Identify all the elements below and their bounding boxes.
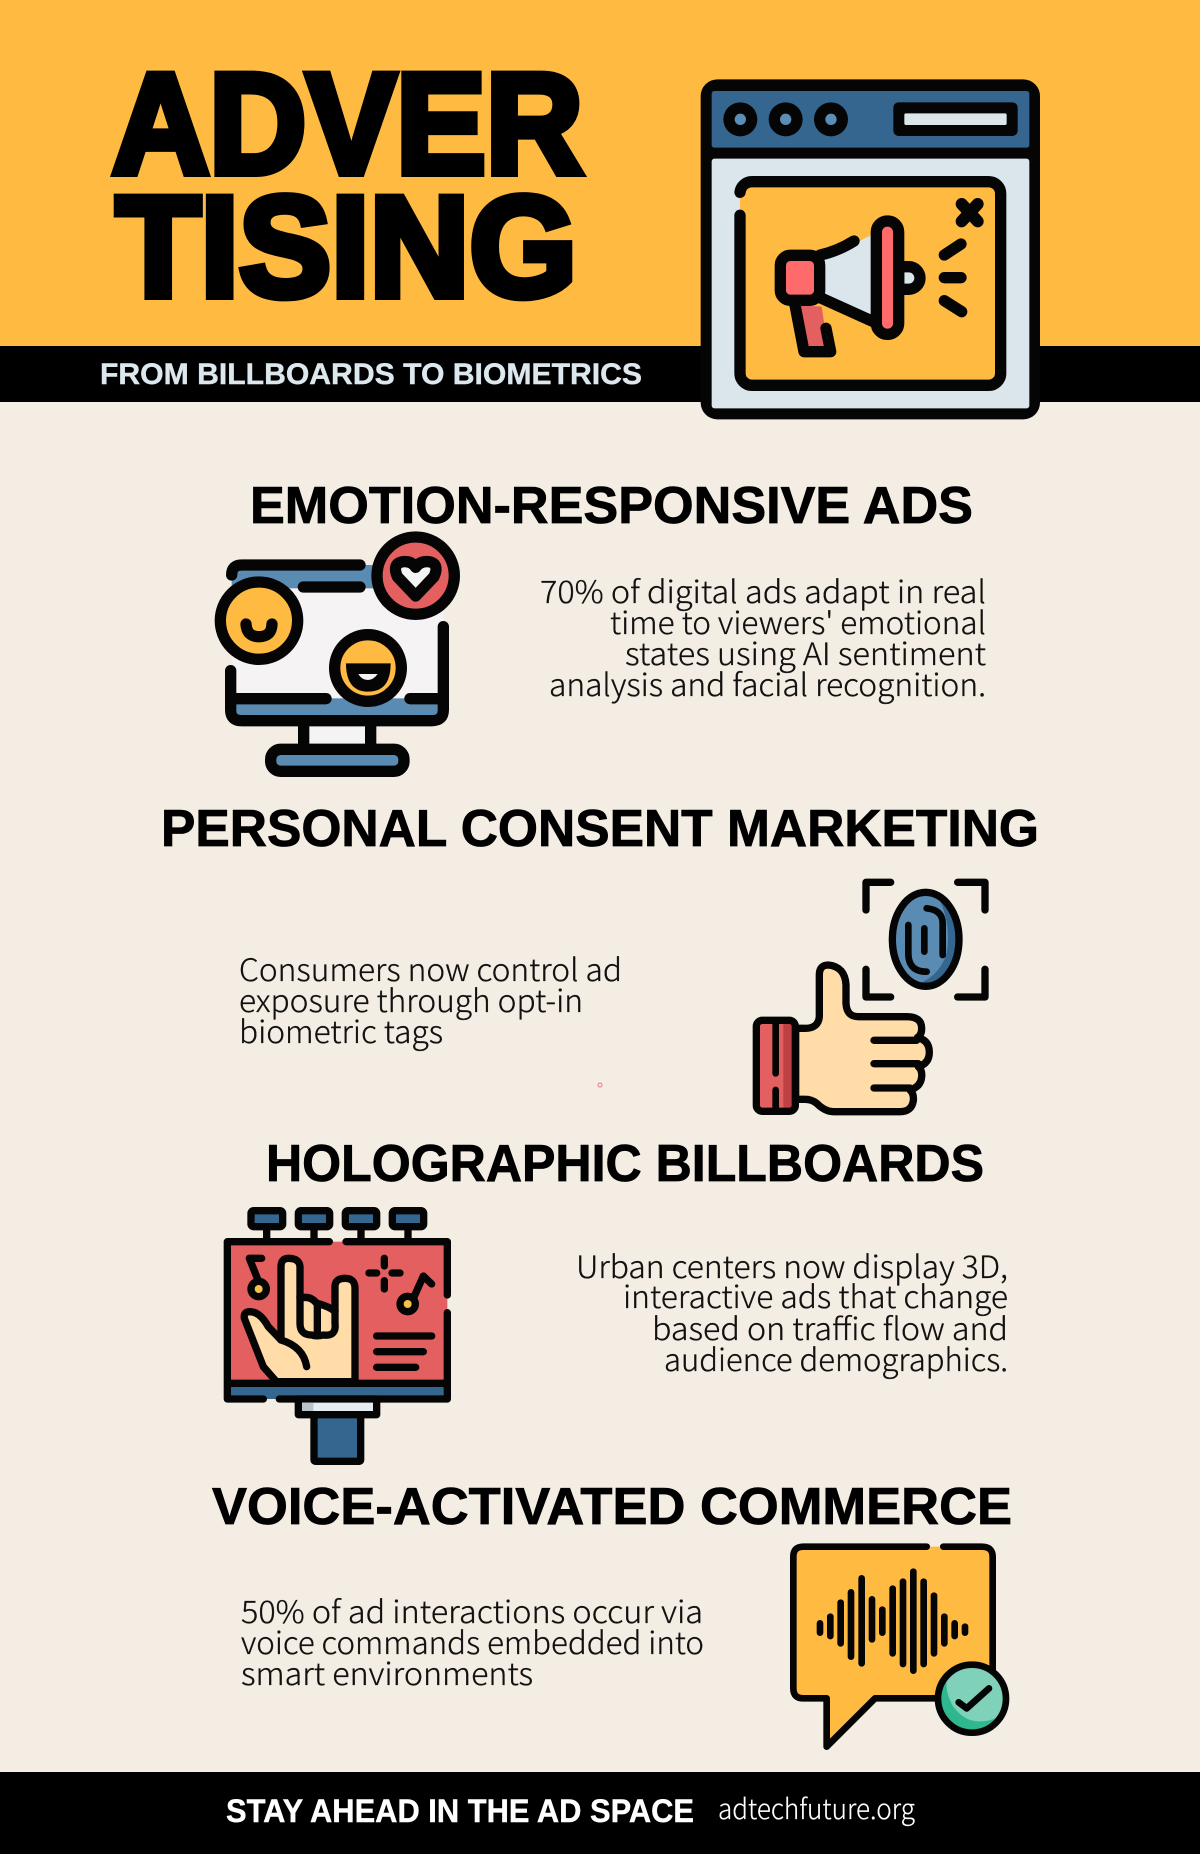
text: personal consent description xyxy=(239,945,622,1052)
subtitle bar: FROM BILLBOARDS TO BIOMETRICS xyxy=(100,358,642,391)
text: emotion-responsive ads description: states using AI sentiment xyxy=(625,629,986,674)
icon: speech bubble with sound wave and check xyxy=(793,1547,1007,1747)
heading: holographic billboards: HOLOGRAPHIC BILLBOARDS xyxy=(266,1135,984,1193)
footer bar: STAY AHEAD IN THE AD SPACE xyxy=(226,1793,694,1829)
title: ADVER xyxy=(112,45,583,204)
header band xyxy=(0,0,1200,346)
text: personal consent description: exposure through opt-in xyxy=(239,976,583,1021)
text: emotion-responsive ads description xyxy=(540,567,986,705)
text: voice-activated commerce description: smart environments xyxy=(241,1649,533,1694)
text: emotion-responsive ads description: analysis and facial recognition. xyxy=(549,660,986,705)
text: holographic billboards description: audience demographics. xyxy=(664,1335,1008,1380)
text: personal consent description: biometric tags xyxy=(239,1007,443,1052)
text: holographic billboards description xyxy=(576,1242,1008,1380)
subtitle bar xyxy=(0,346,1200,402)
text: personal consent description: Consumers now control ad xyxy=(239,945,622,990)
text: emotion-responsive ads description: time to viewers' emotional xyxy=(610,598,986,643)
title: TISING xyxy=(116,168,577,327)
text: voice-activated commerce description xyxy=(241,1587,704,1694)
text: holographic billboards description: Urban centers now display 3D, xyxy=(576,1242,1008,1287)
text: voice-activated commerce description: 50% of ad interactions occur via xyxy=(241,1587,703,1632)
text: emotion-responsive ads description: 70% of digital ads adapt in real xyxy=(540,567,986,612)
icon: billboard with rock hand xyxy=(227,1211,447,1461)
title xyxy=(112,45,583,327)
text: holographic billboards description: based on traffic flow and xyxy=(652,1304,1008,1349)
heading: voice-activated commerce: VOICE-ACTIVATED COMMERCE xyxy=(212,1478,1012,1536)
small marker dot xyxy=(598,1083,602,1087)
footer bar xyxy=(0,1772,1200,1854)
icon: monitor with emoji reactions xyxy=(220,537,454,771)
heading: emotion-responsive ads: EMOTION-RESPONSIVE ADS xyxy=(250,477,973,535)
heading: personal consent marketing: PERSONAL CONSENT MARKETING xyxy=(161,800,1039,858)
icon: browser window with megaphone xyxy=(701,79,1040,419)
footer bar: adtechfuture.org xyxy=(718,1788,915,1828)
icon: thumbs up with fingerprint scan xyxy=(756,882,985,1112)
text: voice-activated commerce description: voice commands embedded into xyxy=(241,1618,704,1663)
text: holographic billboards description: interactive ads that change xyxy=(623,1272,1008,1317)
